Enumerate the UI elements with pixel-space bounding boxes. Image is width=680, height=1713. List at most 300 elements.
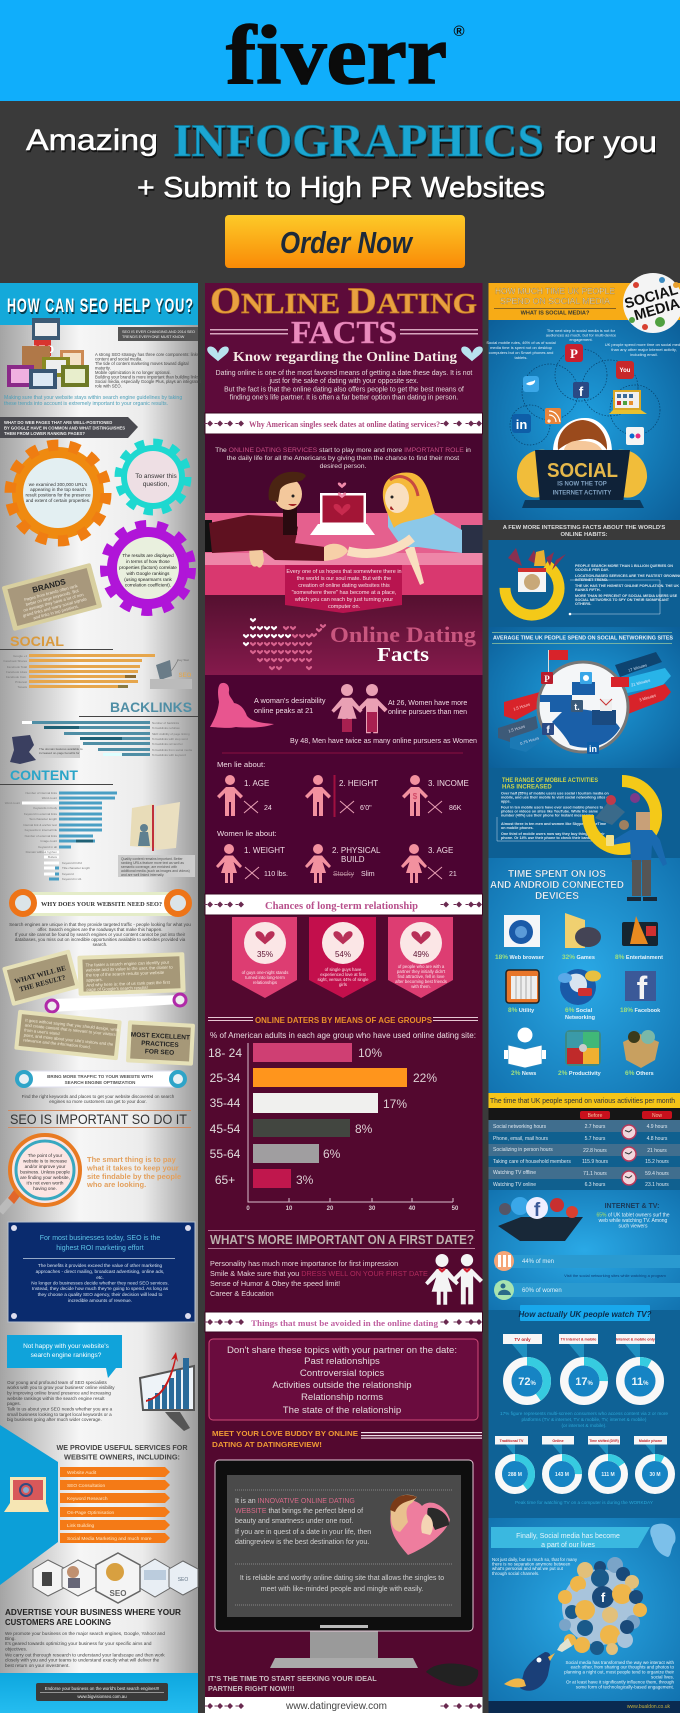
promo line 1: [26, 115, 657, 167]
banner: a part of our lives: [541, 1542, 595, 1549]
monitor screen: If you are in quest of a date in your life, then: [235, 1529, 371, 1536]
teal sentence: these trends into account is extremely important to your organic results.: [4, 401, 168, 407]
lie: weight: [216, 844, 288, 883]
bar chart: social: [0, 633, 192, 689]
icon: social networking: [558, 969, 601, 1021]
icon: SEO monitors: SEO: [31, 344, 55, 356]
navy box: they choose a quality SEO agency, their decision will lead to: [38, 1292, 163, 1297]
note: multi-screen: platforms (TV & internet, TV & mobile, TV, internet & mobile): [522, 1417, 647, 1422]
bar chart: social: Facebook Likes: [6, 670, 27, 674]
bar chart: content: Keyword in alt: [38, 845, 57, 849]
table rows: [488, 1120, 680, 1190]
left panel: how can SEO help you: [0, 283, 202, 1713]
table rows: 4.9 hours: [647, 1124, 668, 1130]
body: [501, 792, 611, 840]
donut: traditional TV: Traditional TV: [500, 1439, 524, 1443]
note: faster identification: The faster a search engine can identify your: [86, 960, 170, 968]
bar chart: backlinks: [10, 699, 198, 764]
icon: facebook: 18% Facebook: [620, 1007, 661, 1014]
intro text: Mobile optimization is no longer optional.: [95, 370, 171, 375]
heading: online dating facts: Online Dating: [330, 622, 476, 647]
center panel: online dating facts: [204, 281, 483, 1713]
icon: productivity: [558, 1030, 602, 1077]
icon: hearts: [207, 347, 483, 361]
paragraph: social media transformed: [564, 1660, 674, 1690]
body: One third of mobile users now say they buy things via their: [501, 832, 605, 836]
title block: [205, 281, 482, 413]
values: 17%: [383, 1097, 407, 1111]
banner: 35%: 35%: [257, 950, 273, 959]
sentence: right keywords: Find the right keywords and places to get your website discovered on search: [22, 1094, 175, 1099]
table rows: 71.1 hours: [583, 1171, 607, 1177]
lie: physical build: [305, 844, 381, 883]
heading: HAS INCREASED: [502, 784, 552, 790]
dark tag: SEO IS EVER CHANGING AND 2014 SEO: [122, 330, 195, 334]
ribbons: 1.5 Hours: [513, 702, 531, 712]
note: what will be the result: THE RESULT?: [19, 973, 67, 994]
bar chart: social: Pinterest: [15, 680, 27, 684]
paragraph: advertise: closely with you and your teams to understand exactly what will deliver the: [5, 1658, 160, 1662]
teal gear: question,: [143, 481, 169, 488]
heading: meet your love buddy: [212, 1429, 482, 1449]
bar chart: content: Number of internal links: [25, 791, 57, 795]
fiverr header band: [0, 0, 680, 102]
pill: bring more traffic: BRING MORE TRAFFIC TO YOUR WEBSITE WITH: [47, 1074, 153, 1079]
order now button: [225, 215, 465, 268]
icon: growth chart monitor: [140, 1352, 194, 1431]
stat: men: 44% of men: [522, 1259, 554, 1265]
bar chart: content: Text character length: [29, 817, 57, 821]
stat: desirability: online peaks at 21: [254, 706, 313, 715]
purple gear: The results are displayed: [122, 553, 174, 558]
purple gear: [105, 525, 191, 611]
paragraph: social media transformed: planning a night out, most people tend to organize their: [564, 1670, 674, 1674]
right panel: social media: [486, 273, 680, 1713]
magnifier: business. Unless people: [20, 1170, 70, 1174]
small text: media time is spent not on desktop: [490, 345, 553, 350]
values: 22%: [413, 1071, 437, 1085]
illustration: person at laptop: SOCIAL: [547, 460, 618, 482]
orange statement: [86, 1155, 181, 1189]
icon: utility: 8% Utility: [508, 1007, 535, 1014]
stripe: website: www.datingreview.com: [285, 1701, 387, 1712]
section: internet and TV: [488, 1190, 680, 1310]
list: first date tips: Sense of Humor & Obey the speed limit!: [210, 1279, 340, 1288]
values: [296, 1046, 437, 1187]
note: brands: grand links and many social signals: [22, 596, 87, 618]
lie: age: 1. AGE: [244, 779, 269, 788]
paragraph: young team: website rankings within the search engine result: [7, 1396, 105, 1401]
icons: networks: [512, 344, 647, 445]
bar chart: backlinks: % backlinks with stop word: [152, 737, 188, 741]
heading: [502, 778, 598, 790]
magnifier: and/or improve your: [25, 1164, 66, 1169]
banner: 49%: 49%: [413, 950, 429, 959]
note: keep content relevant: relevance and the information found.: [23, 1037, 91, 1049]
navy box: approaches - direct mailing, broadcast advertising, online ads,: [36, 1269, 164, 1274]
section: what is social media: [486, 320, 680, 520]
monitor: [215, 1460, 473, 1668]
body: phone. Or 14% use their phone to check their bank balance.: [501, 836, 606, 840]
purple ring strip: [46, 994, 186, 1012]
list: first date tips: Personality has much more importance for first impression: [210, 1259, 398, 1268]
gray note: The domain features available to: [39, 747, 83, 751]
age labels: 25-34: [210, 1071, 241, 1085]
icon: tablet with bubbles: f: [534, 1200, 541, 1221]
services list: On-Page Optimisation: [67, 1510, 115, 1516]
left header: HOW CAN SEO HELP YOU?: [7, 296, 194, 317]
services list: Social Media Marketing and much more: [67, 1536, 152, 1542]
stripe: why american singles: Why American singles seek dates at online dating services?: [249, 420, 440, 429]
illustration: person at laptop: INTERNET ACTIVITY: [553, 490, 611, 496]
services list: SEO Consultation: [67, 1483, 105, 1489]
paragraph: young team: Our young and profound team of SEO specialists: [7, 1380, 108, 1385]
ribbons: 3 Minutes: [639, 693, 657, 702]
gray note: [118, 855, 195, 877]
bar chart: content: Keyword in external links: [24, 812, 57, 816]
bar chart: backlinks: % backlinks nofollow: [152, 726, 181, 730]
services list: Website Audit: [67, 1470, 97, 1476]
paragraph: young team: by improving online brand presence and increasing: [7, 1390, 111, 1396]
table rows: 2.7 hours: [585, 1124, 606, 1130]
table rows: Phone, email, mail hours: [493, 1136, 549, 1142]
bar chart: content: [0, 767, 195, 881]
purple gear: in terms of how those: [126, 559, 170, 564]
button heading: [519, 1305, 652, 1321]
bar chart: content: Keyword in H1: [62, 877, 82, 881]
table: activities: [488, 1108, 680, 1190]
donut: TV internet and mobile: TV internet & mobile: [561, 1338, 596, 1342]
callout: soul mate: computer on.: [328, 604, 361, 610]
pill: bring more traffic: SEARCH ENGINE OPTIMIZATION: [65, 1080, 135, 1085]
icon: web browser: [495, 915, 545, 961]
note: faster identification: the top of the search results your website: [86, 970, 165, 978]
icons: networks: f: [579, 384, 584, 399]
stripe: website: [204, 1697, 482, 1713]
note: what will be the result: [2, 949, 80, 1006]
intro text: [95, 352, 202, 388]
icon: tablet with bubbles: [498, 1197, 583, 1241]
logo: fiverr: ®: [453, 23, 465, 40]
section: desirability and lies: [205, 675, 482, 894]
title block: FACTS: [291, 314, 397, 350]
services list: Keyword Research: [67, 1496, 108, 1502]
paragraph: advertise: [5, 1631, 165, 1668]
promo banner: [26, 115, 657, 268]
heart map panel: [205, 595, 482, 675]
note: keep content relevant: [14, 1010, 122, 1060]
note: keep content relevant: from a user's stand: [24, 1027, 61, 1036]
navy box: For most businesses today, SEO is the: [40, 1235, 160, 1242]
intro paragraph: Dating online is one of the most favored means of getting a date these days. It is not: [216, 370, 472, 377]
donut: traditional TV: [495, 1436, 532, 1490]
heading: [490, 869, 624, 902]
note: brands: and links in top positions.: [33, 604, 79, 620]
stat: by 48: By 48, Men have twice as many online pursuers as Women: [290, 736, 477, 745]
icon: productivity: 2% Productivity: [558, 1070, 602, 1077]
paragraph: services: the daily life for all the Americans by giving them the chance to find their most: [227, 455, 459, 462]
lie: age: 21: [449, 871, 457, 878]
dark arrow banner: BY GOOGLE HAVE IN COMMON AND WHAT DISTINGUISHES: [4, 426, 125, 430]
lie: weight: 1. WEIGHT: [244, 846, 285, 855]
text: internet and TV: INTERNET & TV:: [605, 1203, 659, 1210]
promo line 1: Amazing: [26, 124, 158, 157]
heart map panel: Facts: [377, 644, 429, 666]
donut: TV only: TV only: [514, 1337, 531, 1342]
banner: 54%: of single guys have: [325, 967, 362, 972]
box: topics to avoid: Relationship norms: [301, 1392, 383, 1403]
banner: [491, 1527, 650, 1549]
intro text: role with SEO.: [95, 384, 122, 388]
intro text: maturity.: [95, 366, 111, 370]
monitor screen: beauty and smartness under one roof.: [235, 1518, 353, 1525]
donut: TV internet and mobile: 17%: [575, 1376, 593, 1388]
donut: TV internet and mobile: [559, 1334, 604, 1401]
flag icons: in: [589, 744, 597, 754]
heading: services: WEBSITE OWNERS, INCLUDING:: [64, 1452, 180, 1462]
icon: news: [504, 1028, 546, 1077]
magnifier: it's not even worth: [27, 1180, 64, 1186]
bubble cloud: [557, 1557, 647, 1655]
stripe: chances: [204, 894, 482, 915]
monitor screen: datingreview is the best destination for you.: [235, 1539, 369, 1546]
paragraph: not just daily: what's personal and what we put out: [492, 1566, 564, 1571]
stat: desirability: [254, 696, 326, 715]
callout: soul mate: the world is our soul mate. But with the: [297, 576, 391, 582]
yellow ring chart: [495, 548, 569, 625]
age labels: 18- 24: [208, 1046, 242, 1060]
section: online habits: [488, 540, 680, 627]
paragraph: advertise: We promote your business on the major search engines, Google, Yahoo! and: [5, 1631, 165, 1636]
donut: internet and mobile only: 11%: [632, 1376, 649, 1388]
lie: age: [217, 775, 272, 816]
illustration: woman: [348, 472, 482, 585]
bar chart: social: Facebook Total: [7, 665, 27, 669]
men lie about: [217, 760, 469, 817]
heading: meet your love buddy: DATING AT DATINGREVIEW!: [212, 1440, 322, 1449]
speech bubble: not happy: search engine rankings?: [31, 1352, 102, 1359]
age labels: 55-64: [210, 1147, 241, 1161]
text: internet and TV: such viewers: [619, 1224, 648, 1230]
gray note: [37, 745, 83, 758]
table rows: Watching TV offline: [493, 1170, 536, 1176]
flag icons: f: [546, 725, 550, 736]
note: brands: better on large keywords. But: [25, 588, 80, 607]
orange statement: what it takes to keep your: [86, 1164, 179, 1172]
habit text: PEOPLE SEARCH MORE THAN 1 BILLION QUERIES ON: [575, 564, 673, 568]
intro text: A strong SEO strategy has three core components: links,: [95, 352, 200, 357]
small text: computers but on Smart phones and: [489, 350, 553, 355]
note: brands: Pages from brands often rank: [24, 583, 79, 602]
lie: height: [305, 775, 378, 817]
banners: relationship stats: [232, 917, 453, 998]
lie: physical build: 2. PHYSICAL: [332, 846, 381, 855]
paragraph: advertise: best return on your investment.: [5, 1663, 70, 1668]
section: average time: AVERAGE TIME UK PEOPLE SPEND ON SOCIAL NETWORKING SITES: [493, 636, 674, 642]
paragraph: young team: Talk to us about your SEO needs whether you are a: [7, 1406, 113, 1412]
right header: [488, 283, 680, 320]
stat: at 26: online pursuers than men: [388, 709, 467, 716]
stat: desirability: A woman's desirability: [254, 696, 326, 705]
icons: networks: You: [620, 368, 631, 374]
subtitle: Know regarding the Online Dating: [233, 350, 457, 365]
ribbons: 21 Minutes: [631, 678, 651, 687]
icons: networks: P: [570, 346, 578, 361]
paragraph: advertise: We carry out thorough research to understand your landscape and then work: [5, 1652, 165, 1658]
navy box: No longer do businesses decide whether they need SEO services.: [31, 1280, 169, 1286]
speech bubble: not happy: [7, 1335, 122, 1378]
dark tag: TRENDS EVERYONE MUST KNOW: [122, 335, 185, 339]
text: internet and TV: 65% of UK tablet owners surf the: [596, 1212, 670, 1218]
paragraph: not just daily: [492, 1557, 578, 1576]
icon: web browser: 18% Web browser: [495, 954, 545, 961]
table rows: 6.3 hours: [585, 1182, 606, 1188]
orange statement: The smart thing is to pay: [87, 1155, 177, 1164]
illustration: book: [130, 802, 180, 851]
lie: age: 3. AGE: [428, 846, 453, 855]
orange gear: and extent of certain properties.: [26, 498, 90, 503]
axis: 10: [286, 1206, 293, 1212]
scene section: [205, 435, 482, 613]
donut: internet and mobile only: Internet & mobile only: [616, 1338, 656, 1342]
orange gear: result positions for the presence: [25, 492, 91, 498]
right footer: www.bualdon.co.uk: [627, 1704, 670, 1710]
table rows: 21 hours: [647, 1148, 667, 1154]
paragraph: advertise: objectives.: [5, 1646, 27, 1652]
lie: height: 6'0": [360, 805, 372, 812]
gray note: and are well linked internally.: [121, 873, 164, 877]
small text: Social mobile rules, 46% of us of social: [486, 340, 556, 345]
bar chart: backlinks: % backlinks with keyword: [152, 753, 186, 757]
bars: [253, 1043, 407, 1188]
heading: DEVICES: [535, 891, 579, 902]
axis: 0: [246, 1206, 250, 1212]
gray note: Quality content remains important. Better: [121, 857, 183, 861]
orange gear: appearing in the top search: [30, 487, 86, 492]
body: Almost three in ten men and women like Skype or FaceTime: [501, 822, 606, 826]
values: 8%: [355, 1122, 373, 1136]
note: keep content relevant: and create content that is relevant to your visitors: [25, 1022, 116, 1037]
axis: [246, 1043, 459, 1212]
teal gear: To answer this: [135, 473, 178, 480]
illustration: laptop: [310, 482, 375, 535]
lie: physical build: Slim: [361, 871, 375, 878]
habit text: LOCATION-BASED SERVICES ARE THE FASTEST GROWING: [575, 574, 680, 578]
button heading: How actually UK people watch TV?: [519, 1310, 652, 1319]
banner: 35%: of guys one-night stands: [242, 970, 288, 975]
icon: facebook: [620, 970, 661, 1014]
note: most excellent practices: PRACTICES: [141, 1040, 180, 1049]
paragraph: social media transformed: Or at least have it significantly influence them, through: [566, 1680, 674, 1684]
intro text: The tide of content marketing moves toward digital: [95, 361, 189, 366]
social media ball: SOCIAL: [623, 282, 680, 312]
banner: 54%: sight, versus 44% of single: [317, 977, 369, 982]
bar chart: backlinks: BACKLINKS: [110, 699, 192, 715]
small text: audiences as much, but for multi-device: [546, 332, 617, 338]
donut: mobile phone: Mobile phone: [639, 1439, 662, 1443]
network rings: [510, 349, 660, 445]
chart subtitle: % of American adults in each age group who have used online dating site:: [210, 1031, 476, 1040]
navy box: etc.: [96, 1275, 104, 1280]
monitor screen: WEBSITE that brings the perfect blend of: [235, 1508, 363, 1515]
banner: 54%: experienced love at first: [320, 972, 366, 977]
stat: women: [494, 1280, 680, 1300]
paragraph: young team: small business looking to target local keywords or a: [7, 1412, 112, 1417]
section: how UK watches TV: [488, 1305, 680, 1518]
magnifier: are finding your website,: [20, 1175, 70, 1180]
box: topics to avoid: [209, 1339, 478, 1420]
sentence: right keywords: [22, 1094, 175, 1104]
callout: soul mate: creation of online dating websites this: [298, 583, 390, 589]
donut: online: Online: [552, 1439, 564, 1443]
heading: THE RANGE OF MOBILE ACTIVITIES: [502, 778, 598, 784]
navy box: The benefits it provides exceed the value of other marketing: [38, 1263, 163, 1268]
lie: physical build: BUILD: [341, 855, 365, 864]
lie: income: 3. INCOME: [428, 779, 469, 788]
illustration: man with phone: [606, 812, 667, 901]
left footer: [0, 1673, 198, 1713]
stripe: avoid: [204, 1312, 482, 1332]
note: multi-screen: [500, 1411, 668, 1428]
section: finally social media: [488, 1518, 680, 1701]
dark arrow banner: THEM FROM LOWER RANKING PAGES?: [4, 431, 85, 436]
text: internet and TV: [596, 1203, 670, 1230]
age labels: 45-54: [210, 1122, 241, 1136]
lie: weight: 110 lbs.: [264, 871, 288, 878]
axis: 40: [409, 1206, 416, 1212]
band: more interesting facts: [503, 525, 665, 538]
table header: Before: [588, 1113, 603, 1119]
magnifier: having one.: [33, 1186, 57, 1191]
bar chart: content: Domain without hyphen: [26, 850, 57, 854]
icon: mouse: [426, 1664, 478, 1686]
table rows: Socializing in person hours: [493, 1147, 553, 1153]
gray note: semantic coverage, are enriched with: [121, 865, 177, 869]
bar chart: content: Word count: [5, 801, 20, 805]
paragraph: search engines: Search engines are unique in that they provide targeted traffic - people looking for what you: [9, 922, 191, 927]
note: keep content relevant: It goes without saying that you should design, write: [25, 1017, 120, 1032]
illustration: heart couple: [390, 1495, 450, 1555]
bar chart: content: Word count: [42, 796, 57, 800]
axis: 20: [327, 1206, 334, 1212]
small text: than any other major Internet activity,: [611, 347, 677, 352]
right footer: [488, 1701, 680, 1713]
gray note: increased on-page benefits for: [39, 751, 80, 755]
illustration: person at laptop: [517, 418, 647, 508]
mascot and note: [150, 658, 192, 689]
paragraph: advertise: It's geared towards optimizing your business for your specific aims and: [5, 1641, 152, 1646]
bar chart: online daters by age: [208, 1016, 478, 1212]
yellow ring with man: [588, 781, 656, 849]
paragraph: young team: big business going after much wider coverage.: [7, 1417, 102, 1422]
heading: first date: WHAT'S MORE IMPORTANT ON A FIRST DATE?: [210, 1232, 474, 1247]
note: most excellent practices: [126, 1020, 195, 1066]
icon: games: 32% Games: [562, 954, 595, 961]
gray note: additional media (such as images and videos): [121, 869, 190, 873]
body: Over half (55%) of mobile users use social / tourism media on: [501, 792, 610, 796]
donut: mobile phone: 30 M: [649, 1472, 661, 1478]
lie: income: $: [413, 792, 418, 801]
flag icons: P: [544, 674, 550, 684]
lie: age: 24: [264, 805, 272, 812]
small text: tablets.: [515, 355, 527, 360]
bar chart: social: Facebook Com.: [6, 675, 27, 679]
chart heading: ONLINE DATERS BY MEANS OF AGE GROUPS: [255, 1016, 433, 1025]
navy box: incredible amounts of revenue.: [68, 1298, 132, 1303]
habit text: GOOGLE PER DAY.: [575, 568, 609, 572]
icon: social networking: 6% Social: [565, 1007, 593, 1014]
text: internet and TV: web while watching TV. Among: [599, 1218, 668, 1224]
